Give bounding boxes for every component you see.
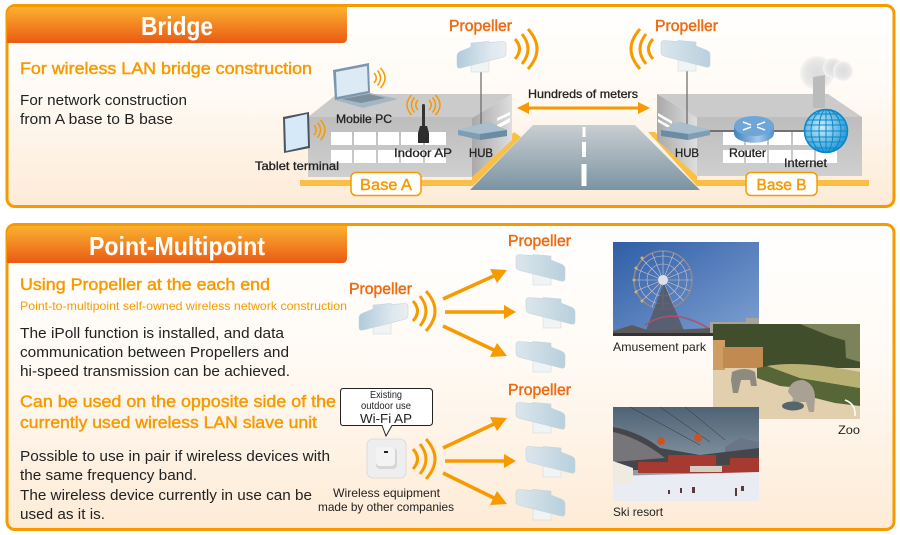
icon: wireless equipment: [367, 439, 435, 479]
text: pairing description: The wireless device currently in use can be: [20, 487, 312, 504]
label: wireless equipment: made by other companies: [318, 500, 454, 514]
label: transmitter propeller: Propeller: [349, 281, 413, 298]
icon: indoor AP: [407, 95, 440, 143]
building: base A: [300, 94, 521, 186]
text: pairing description: the same frequency band.: [20, 467, 197, 484]
subheading: bridge: For wireless LAN bridge construction: [20, 59, 312, 78]
label: wireless equipment: [318, 486, 454, 514]
photo: zoo: [713, 324, 860, 419]
text: iPoll description: The iPoll function is installed, and data: [20, 325, 285, 342]
text: pairing description: [20, 448, 330, 523]
label: zoo: Zoo: [838, 423, 860, 437]
label: base A: Base A: [360, 177, 412, 194]
panel: point-multipoint: [7, 224, 894, 530]
icon: factory chimney and smoke: [800, 56, 853, 108]
label: router: Router: [729, 146, 766, 160]
heading: point-multipoint: [7, 226, 347, 263]
icon: router: [734, 116, 774, 143]
photo: amusement park: [613, 242, 759, 336]
photo: ski resort: [613, 407, 759, 501]
subheading: using propeller at each end: Using Propeller at the each end: [20, 275, 270, 294]
label: propeller A: Propeller: [449, 18, 513, 35]
label: base B: [746, 172, 817, 196]
label: mobile PC: Mobile PC: [336, 112, 392, 126]
callout: existing outdoor use Wi-Fi AP: [340, 388, 432, 436]
text: bridge description: from A base to B base: [20, 111, 173, 128]
road with hundreds of meters span: [470, 87, 700, 190]
callout: existing outdoor use Wi-Fi AP: outdoor use: [361, 401, 411, 412]
label: wireless equipment: Wireless equipment: [333, 486, 441, 500]
label: tablet terminal: Tablet terminal: [255, 159, 339, 173]
text: iPoll description: [20, 325, 290, 380]
arrows: first group: [443, 269, 516, 357]
label: ski resort: Ski resort: [613, 505, 664, 519]
text: pairing description: used as it is.: [20, 506, 105, 523]
subheading: opposite side use: [20, 392, 336, 432]
heading: bridge: Bridge: [141, 11, 213, 41]
label: first propeller group: Propeller: [508, 233, 572, 250]
subheading: using propeller at each end: Point-to-multipoint self-owned wireless network construction: [20, 299, 347, 313]
label: propeller B: Propeller: [655, 18, 719, 35]
callout: existing outdoor use Wi-Fi AP: Wi-Fi AP: [360, 411, 412, 426]
first receiver propellers: [516, 254, 575, 372]
label: indoor AP: Indoor AP: [394, 146, 452, 160]
building: base B: [648, 94, 869, 186]
icon: tablet terminal: [283, 112, 325, 153]
label: HUB A: HUB: [469, 146, 493, 160]
arrows: second group: [443, 417, 516, 505]
panel: bridge: [7, 6, 894, 206]
label: second propeller group: Propeller: [508, 382, 572, 399]
label: internet: Internet: [784, 156, 828, 170]
callout: existing outdoor use Wi-Fi AP: Existing: [370, 390, 402, 401]
label: base A: [351, 172, 421, 196]
propeller B on mast with hub: [631, 29, 710, 140]
icon: mobile PC: [333, 63, 398, 108]
text: iPoll description: communication between Propellers and: [20, 344, 289, 361]
subheading: opposite side use: currently used wireless LAN slave unit: [20, 413, 317, 432]
text: pairing description: Possible to use in pair if wireless devices with: [20, 448, 330, 465]
text: bridge description: [20, 92, 187, 128]
network connection line: [700, 130, 815, 132]
heading: bridge: [7, 7, 347, 43]
text: bridge description: For network construction: [20, 92, 187, 109]
text: iPoll description: hi-speed transmission can be achieved.: [20, 363, 290, 380]
heading: point-multipoint: Point-Multipoint: [89, 231, 265, 261]
label: base B: Base B: [756, 177, 806, 194]
subheading: using propeller at each end: [20, 275, 347, 313]
subheading: opposite side use: Can be used on the opposite side of the: [20, 392, 336, 411]
second receiver propellers: [516, 402, 575, 520]
label: HUB B: HUB: [675, 146, 699, 160]
label: amusement park: Amusement park: [613, 340, 707, 354]
propeller A on mast with hub: [457, 29, 537, 140]
icon: internet globe: [804, 110, 848, 152]
road with hundreds of meters span: Hundreds of meters: [528, 87, 638, 101]
transmitter propeller: [359, 291, 435, 334]
